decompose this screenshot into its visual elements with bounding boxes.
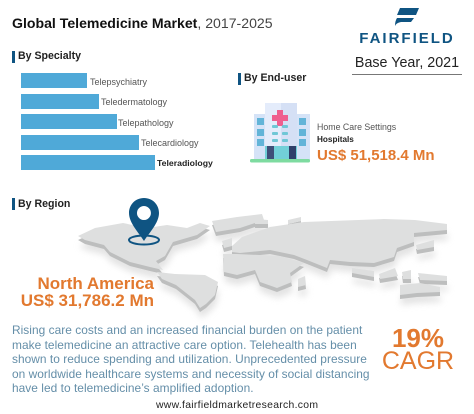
label: teleradiology: Teleradiology — [157, 158, 213, 168]
text block: description: on worldwide healthcare systems and necessity of social distancing — [12, 367, 370, 381]
callout: cagr: 19% — [392, 323, 444, 353]
heading: by end-user: By End-user — [244, 72, 306, 84]
label: teledermatology: Teledermatology — [101, 97, 167, 107]
text block: description: shown to reduce spending and utilization. Unprecedented pressure — [12, 352, 367, 366]
title: Global Telemedicine Market, 2017-2025 — [12, 15, 273, 31]
icon: location pin — [128, 198, 160, 246]
value: hospitals: US$ 51,518.4 Mn — [317, 147, 435, 164]
bar: telepsychiatry — [21, 73, 87, 88]
text: end-user details — [317, 122, 435, 164]
callout: cagr — [382, 323, 454, 375]
bar: teleradiology — [21, 155, 155, 170]
text block: description: Rising care costs and an increased financial burden on the patient — [12, 323, 362, 337]
logo: Fairfield: FAIRFIELD — [359, 30, 455, 47]
bar: telepathology — [21, 114, 117, 129]
label: hospitals: Hospitals — [317, 135, 354, 144]
bar: telecardiology — [21, 135, 139, 150]
base year: Base Year, 2021 — [355, 55, 459, 71]
logo: Fairfield — [359, 8, 455, 47]
icon: hospital — [250, 103, 310, 162]
label: home care settings: Home Care Settings — [317, 122, 396, 132]
callout: north america — [21, 274, 154, 310]
heading: by region: By Region — [18, 198, 70, 210]
text block: description — [12, 323, 370, 395]
text block: description: make telemedicine an attractive care option. Telehealth has been — [12, 338, 357, 352]
label: telepsychiatry: Telepsychiatry — [90, 77, 147, 87]
callout: cagr: CAGR — [382, 347, 454, 375]
callout: north america: North America — [37, 274, 154, 293]
footer url: www.fairfieldmarketresearch.com — [156, 400, 318, 411]
callout: north america: US$ 31,786.2 Mn — [21, 291, 154, 310]
label: telecardiology: Telecardiology — [141, 138, 199, 148]
heading: by specialty: By Specialty — [18, 50, 81, 62]
text block: description: have led to telemedicine’s amplified adoption. — [12, 381, 254, 395]
label: telepathology: Telepathology — [118, 118, 174, 128]
bar: teledermatology — [21, 94, 99, 109]
bar chart: specialty — [21, 73, 213, 170]
